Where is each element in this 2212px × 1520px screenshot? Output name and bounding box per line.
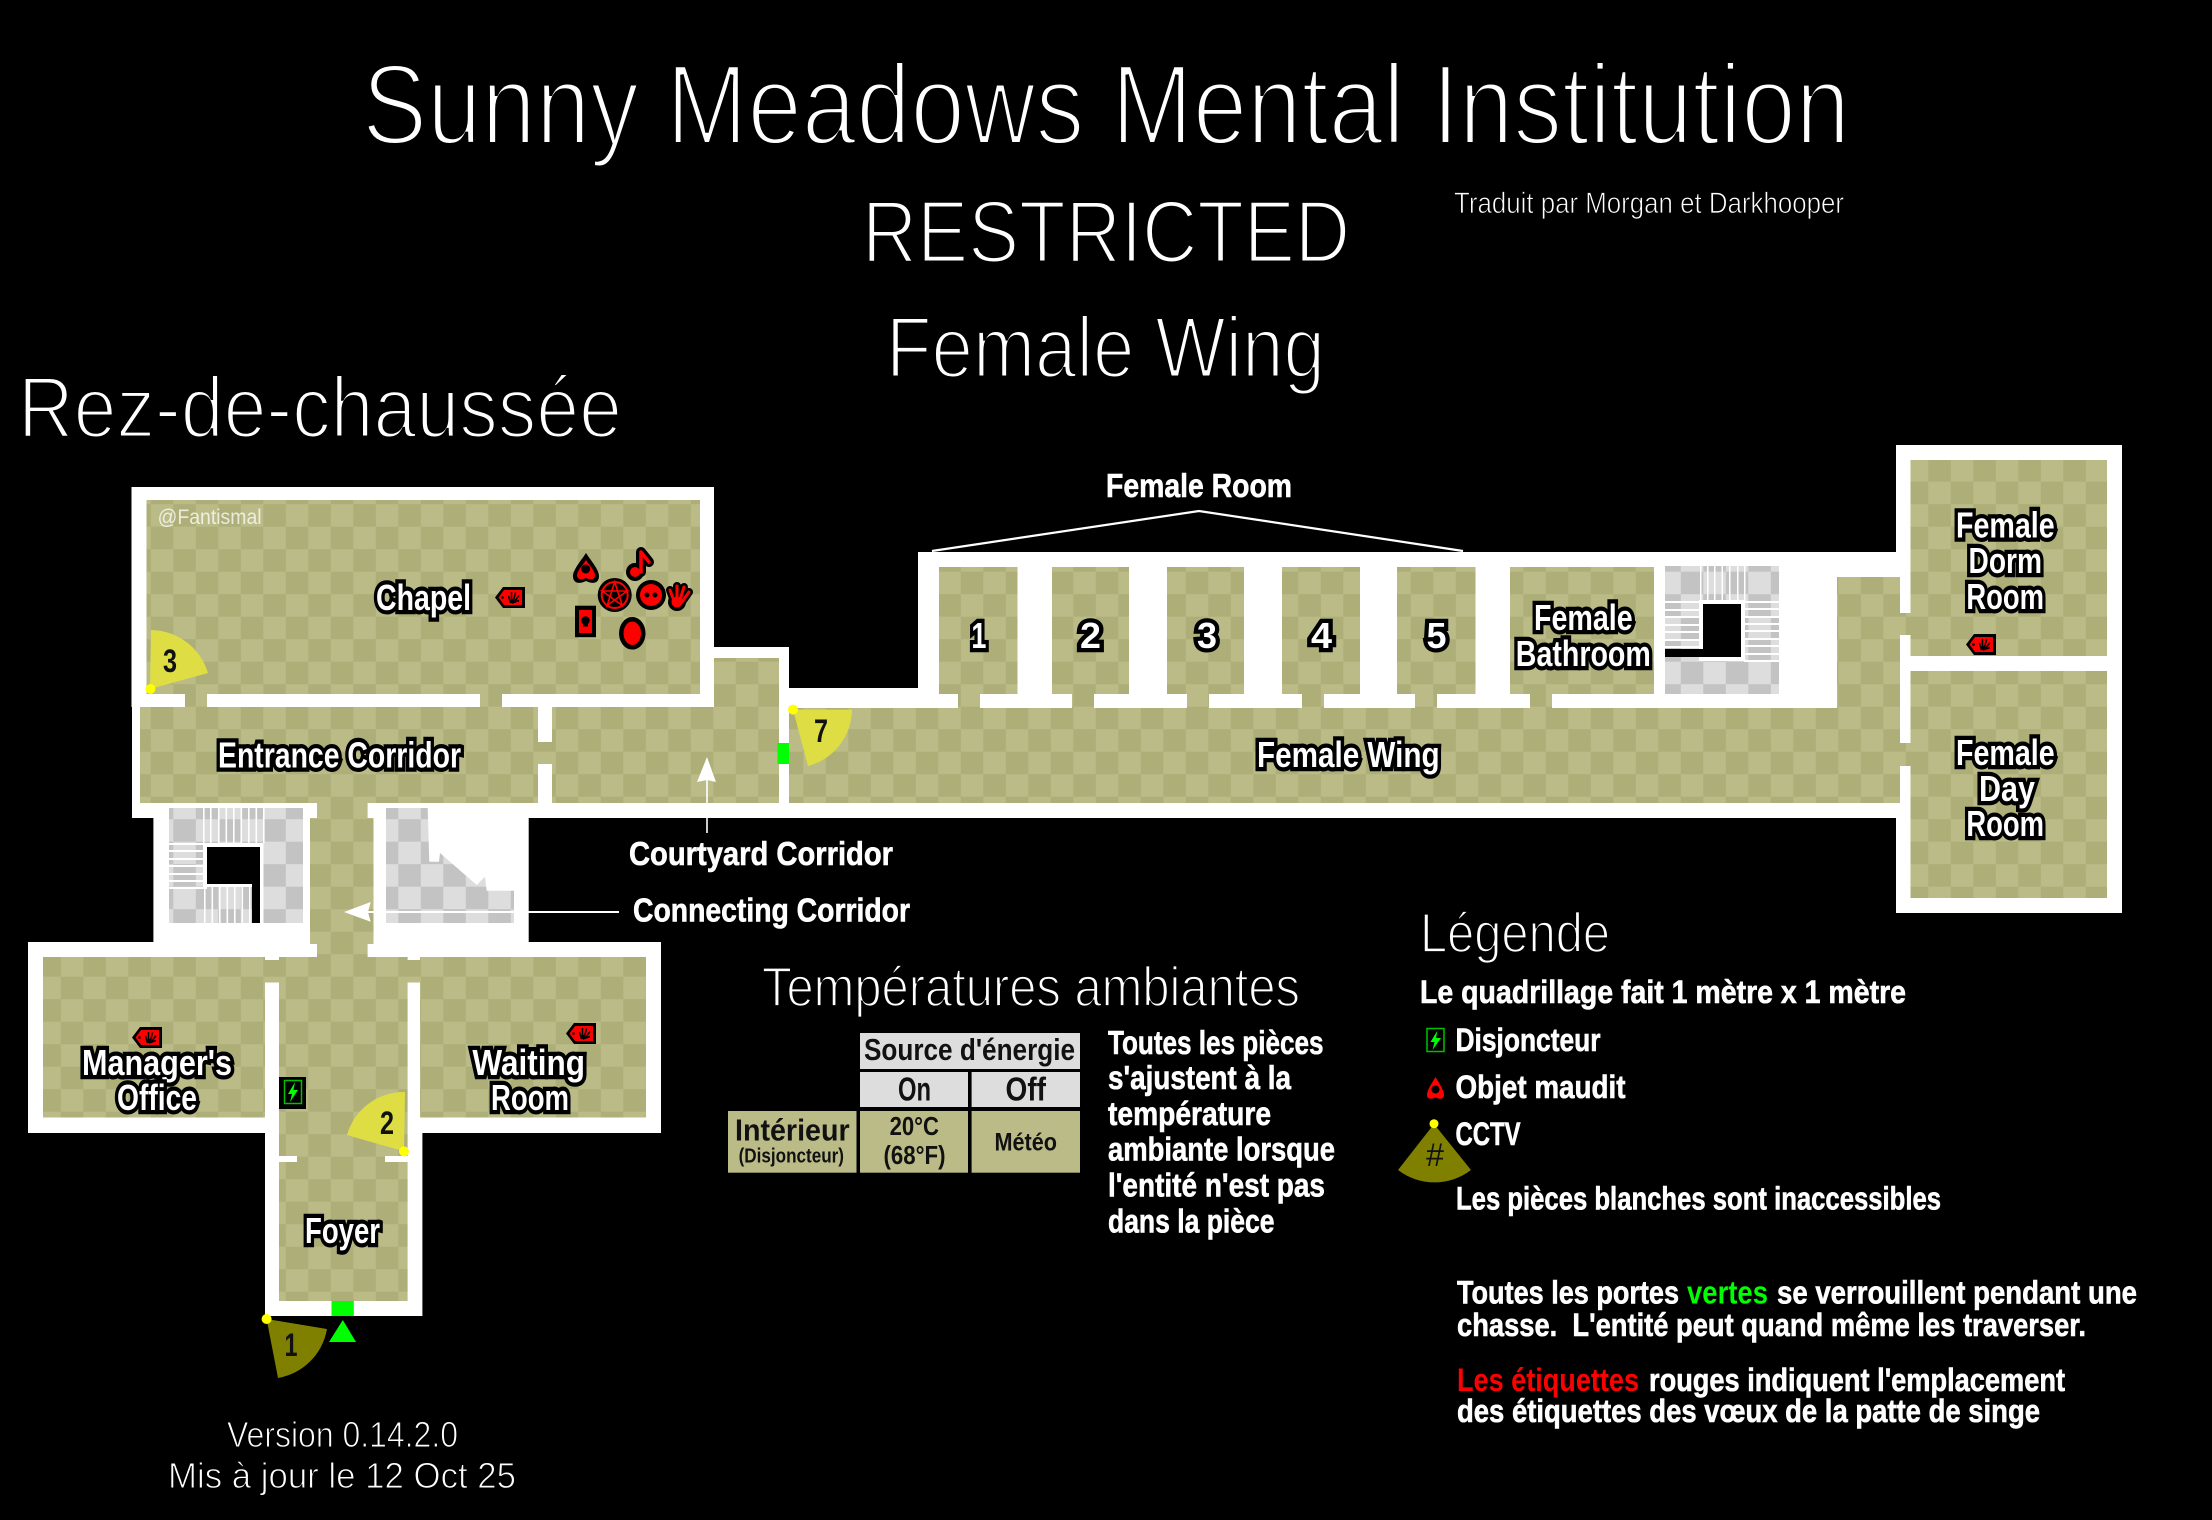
version info: Version 0.14.2.0 (227, 1414, 458, 1455)
note: red tags: Les étiquettes (1457, 1362, 1639, 1398)
row header: interior: (Disjoncteur) (739, 1146, 844, 1168)
row header: interior (728, 1111, 856, 1173)
subtitle: restricted: RESTRICTED (862, 182, 1350, 281)
label: room numbers: 2 (1080, 615, 1101, 656)
icon: mirror (621, 619, 643, 647)
header: on (860, 1071, 968, 1108)
label: room numbers: 4 (1311, 615, 1332, 656)
label: female bathroom: Female (1534, 597, 1633, 638)
label: courtyard corridor: Courtyard Corridor (629, 835, 893, 872)
breaker icon (279, 1077, 306, 1109)
cctv 7: 7 (814, 713, 828, 749)
legend icon: cctv: # (1426, 1137, 1444, 1173)
temperature note: dans la pièce (1108, 1203, 1274, 1240)
cell: off value (972, 1111, 1080, 1173)
label: waiting room: Waiting (472, 1042, 585, 1083)
cctv 1: 1 (284, 1327, 298, 1363)
subtitle: wing name: Female Wing (886, 300, 1325, 396)
label: female dorm room (1956, 504, 2055, 617)
icon: music box (626, 552, 649, 581)
legend text: breaker: Disjoncteur (1456, 1022, 1600, 1058)
room floors (43, 460, 2107, 1301)
icon: ouija planchette (573, 553, 599, 583)
label: connecting corridor: Connecting Corridor (633, 892, 910, 928)
label: female room: Female Room (1106, 467, 1292, 504)
temperature note: température (1108, 1095, 1271, 1132)
header: off: Off (1006, 1071, 1047, 1108)
label: manager's office: Manager's (82, 1042, 232, 1083)
cell: on value: (68°F) (884, 1140, 946, 1170)
legend heading: Légende (1420, 901, 1610, 964)
cctv 2 (347, 1092, 409, 1156)
tag: chapel (495, 587, 525, 608)
legend text: cursed object: Objet maudit (1456, 1069, 1626, 1105)
legend icon: cctv (1398, 1119, 1471, 1182)
temperature note: ambiante lorsque (1108, 1131, 1335, 1168)
legend text: white rooms: Les pièces blanches sont inaccessibles (1456, 1180, 1941, 1216)
legend text: cctv: CCTV (1456, 1116, 1521, 1152)
green doors (332, 743, 789, 1316)
temperature table (728, 1032, 1080, 1173)
version info (168, 1414, 516, 1496)
building walls (28, 445, 2122, 1316)
label: female day room: Day (1979, 768, 2035, 809)
label: foyer: Foyer (305, 1210, 380, 1251)
arrow: courtyard corridor (697, 757, 716, 833)
tag: waiting room (566, 1023, 596, 1044)
stairwell right (1665, 566, 1779, 694)
icon: summoning circle (598, 578, 632, 612)
label: female dorm room: Room (1966, 576, 2044, 617)
cctv 7 (788, 705, 852, 766)
temperature note: l'entité n'est pas (1108, 1167, 1325, 1204)
label: female bathroom: Bathroom (1516, 633, 1651, 674)
cctv 3: 3 (163, 643, 177, 679)
label: room numbers (971, 615, 1446, 656)
label: female day room: Female (1956, 732, 2055, 773)
floor plan (28, 445, 2122, 1378)
tag: dorm room (1966, 634, 1996, 655)
legend (1398, 901, 2137, 1429)
icon: voodoo doll (636, 580, 666, 610)
label: room numbers: 5 (1426, 615, 1446, 656)
floor heading: Rez-de-chaussée (18, 360, 622, 456)
cell: on value (860, 1111, 968, 1173)
label: chapel: Chapel (376, 577, 471, 618)
label: female bathroom (1516, 597, 1651, 674)
foyer door stubs (279, 1156, 408, 1162)
note: green doors (1457, 1274, 2137, 1343)
note: red tags (1457, 1362, 2065, 1429)
inaccessible room (386, 808, 514, 923)
label: female day room: Room (1966, 803, 2044, 844)
cctv 1 (262, 1314, 327, 1378)
title: Sunny Meadows Mental Institution (362, 42, 1850, 169)
cctv 2: 2 (380, 1105, 394, 1141)
tag: manager's office (132, 1027, 162, 1048)
temperature note (1108, 1024, 1335, 1240)
note: red tags: des étiquettes des vœux de la patte de singe (1457, 1393, 2040, 1429)
header: off (972, 1071, 1080, 1108)
heading: temperatures: Températures ambiantes (762, 955, 1300, 1018)
note: red tags: rouges indiquent l'emplacement (1649, 1362, 2065, 1398)
label: manager's office: Office (117, 1077, 197, 1118)
legend icon: cursed object (1427, 1077, 1444, 1099)
cell: on value: 20°C (890, 1111, 939, 1141)
bracket: female room (932, 511, 1463, 551)
header: on: On (898, 1071, 931, 1108)
label: female dorm room: Female (1956, 504, 2055, 545)
note: green doors: se verrouillent pendant une (1777, 1274, 2137, 1310)
entrance arrow (329, 1320, 356, 1342)
cursed objects (573, 552, 689, 647)
temperature note: s'ajustent à la (1108, 1059, 1292, 1096)
cctv 3 (145, 630, 208, 694)
label: female day room (1956, 732, 2055, 844)
translator credit: Traduit par Morgan et Darkhooper (1454, 187, 1844, 220)
arrow: connecting corridor (344, 902, 619, 922)
label: manager's office (82, 1042, 232, 1118)
label: female dorm room: Dorm (1968, 540, 2042, 581)
cell: off value: Météo (994, 1129, 1057, 1157)
label: waiting room: Room (491, 1077, 569, 1118)
label: waiting room (472, 1042, 585, 1118)
temperature note: Toutes les pièces (1108, 1024, 1324, 1061)
icon: tarot card (575, 606, 596, 637)
note: green doors: chasse. L'entité peut quand même les traverser. (1457, 1307, 2086, 1343)
note: green doors: Toutes les portes (1457, 1274, 1679, 1310)
label: female wing: Female Wing (1257, 734, 1440, 775)
legend icon: breaker (1427, 1028, 1444, 1052)
version info: Mis à jour le 12 Oct 25 (168, 1455, 516, 1496)
legend: grid scale: Le quadrillage fait 1 mètre x 1 mètre (1420, 974, 1906, 1010)
stairwell left (169, 808, 303, 923)
header: power source: Source d'énergie (864, 1032, 1075, 1067)
row header: interior: Intérieur (735, 1113, 850, 1148)
label: room numbers: 3 (1197, 615, 1217, 656)
icon: monkey paw (668, 586, 689, 611)
note: green doors: vertes (1687, 1274, 1768, 1310)
label: watermark: @Fantismal (158, 506, 262, 529)
label: room numbers: 1 (971, 615, 986, 656)
label: entrance corridor: Entrance Corridor (218, 735, 461, 776)
